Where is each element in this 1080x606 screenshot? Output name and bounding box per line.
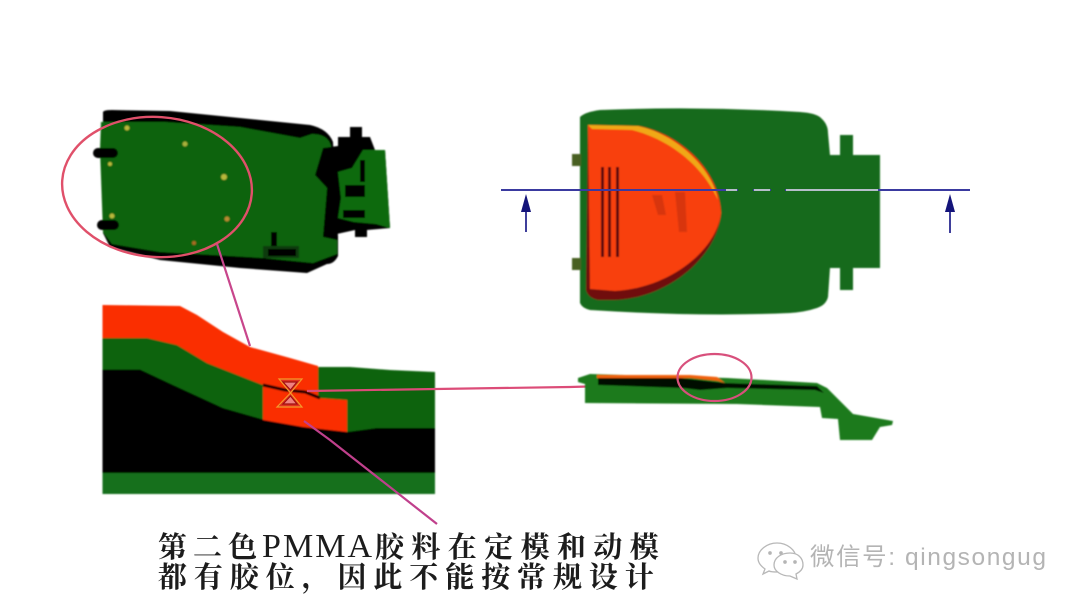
cross-section detail	[102, 305, 435, 494]
section: dark gap line	[263, 385, 320, 398]
arrow: right section marker	[945, 194, 955, 233]
section line A-A	[501, 190, 970, 233]
section: green layer left	[102, 336, 265, 420]
section: black core	[102, 360, 435, 473]
callout: ellipse around left part	[57, 111, 257, 263]
caption text: 胶料在定模和动模	[375, 525, 659, 566]
right part view: front view	[572, 108, 880, 314]
section: red PMMA layer	[102, 305, 347, 432]
side section profile	[578, 374, 893, 440]
connector: dark block	[315, 127, 390, 237]
caption text: 都有胶位，因此不能按常规设计	[158, 555, 654, 596]
caption text: 第二色	[158, 525, 257, 566]
red lens	[586, 125, 721, 300]
caption text	[158, 525, 659, 596]
section: green mould base	[102, 473, 435, 494]
section: green layer right	[316, 367, 435, 432]
arrow: left section marker	[521, 194, 531, 232]
connector: green panel	[338, 150, 390, 228]
leader line: ellipse to section	[217, 244, 250, 346]
icon: WeChat logo	[758, 543, 803, 579]
watermark text: 微信号: qingsongug	[810, 543, 1046, 571]
left part view: angled dark green housing	[93, 110, 390, 273]
callout: ellipse on side section	[678, 354, 752, 401]
caption text: PMMA	[262, 528, 372, 565]
leader line: red layer to caption	[304, 421, 437, 524]
gate symbol: hourglass	[277, 379, 302, 407]
leader line: gate to side section	[307, 384, 677, 391]
